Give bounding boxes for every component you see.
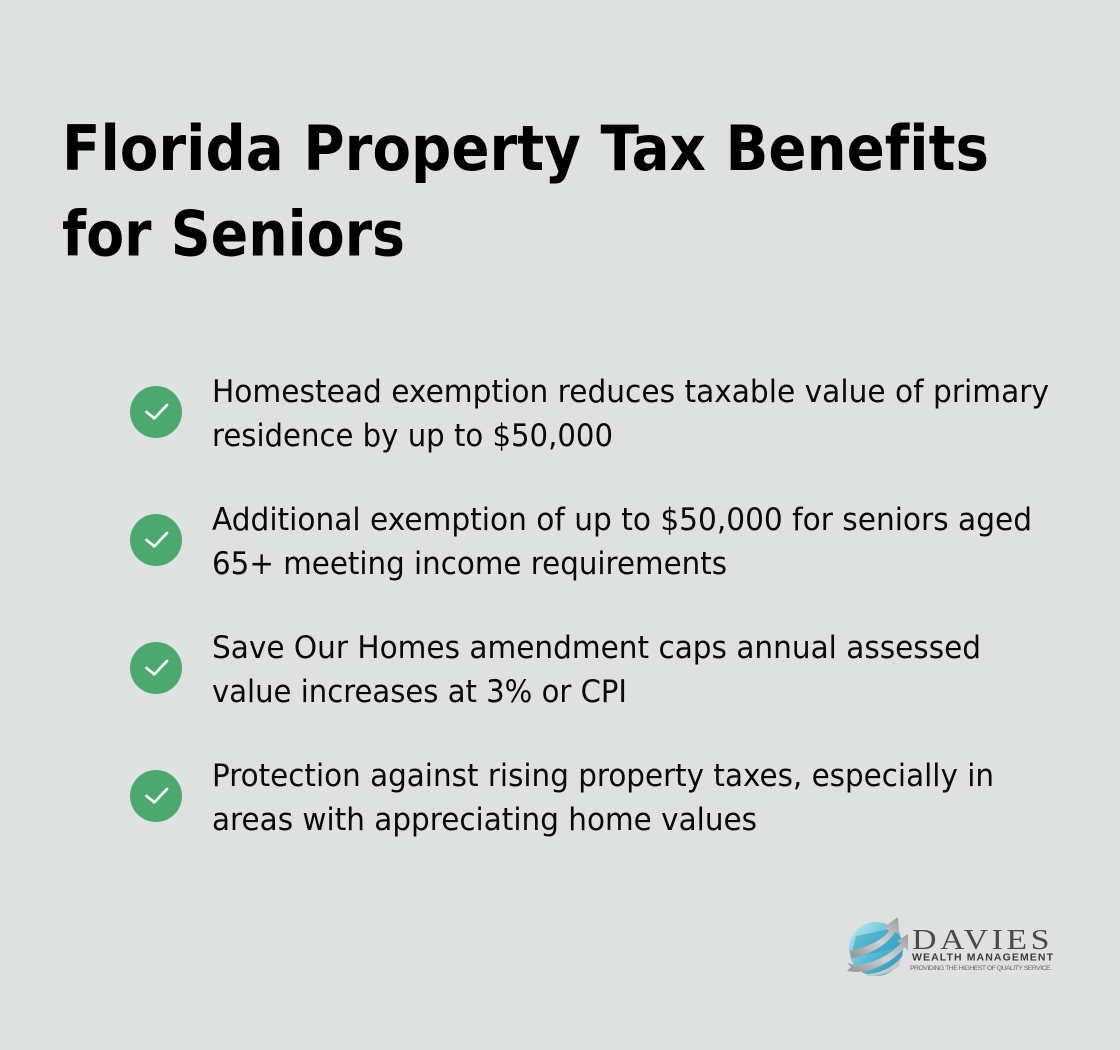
title [62,112,989,270]
icon: green check [130,386,182,438]
logo wordmark: DAVIES [912,924,1053,956]
benefit item 4: protection [130,758,994,838]
text: protection [212,758,994,838]
text: protection: areas with appreciating home values [212,802,757,838]
icon: globe with arrows [847,917,908,976]
text: homestead exemption [212,374,1049,454]
text: save our homes: value increases at 3% or CPI [212,674,627,710]
icon: green check [130,770,182,822]
text: save our homes [212,630,981,710]
benefit item 2: additional exemption [130,502,1032,582]
benefit item 3: save our homes [130,630,981,710]
text: additional exemption [212,502,1032,582]
text: homestead exemption: Homestead exemption reduces taxable value of primary [212,374,1049,410]
title: Florida Property Tax Benefits [62,112,989,185]
text: homestead exemption: residence by up to $50,000 [212,418,613,454]
logo wordmark: PROVIDING THE HIGHEST OF QUALITY SERVICE. [910,965,1052,972]
logo: Davies Wealth Management [847,917,1054,976]
text: additional exemption: 65+ meeting income requirements [212,546,727,582]
text: additional exemption: Additional exemption of up to $50,000 for seniors aged [212,502,1032,538]
logo wordmark: WEALTH MANAGEMENT [912,952,1054,964]
text: save our homes: Save Our Homes amendment caps annual assessed [212,630,981,666]
icon: green check [130,514,182,566]
logo wordmark [910,924,1054,972]
benefit item 1: homestead exemption [130,374,1049,454]
icon: green check [130,642,182,694]
title: for Seniors [62,198,405,270]
text: protection: Protection against rising property taxes, especially in [212,758,994,794]
